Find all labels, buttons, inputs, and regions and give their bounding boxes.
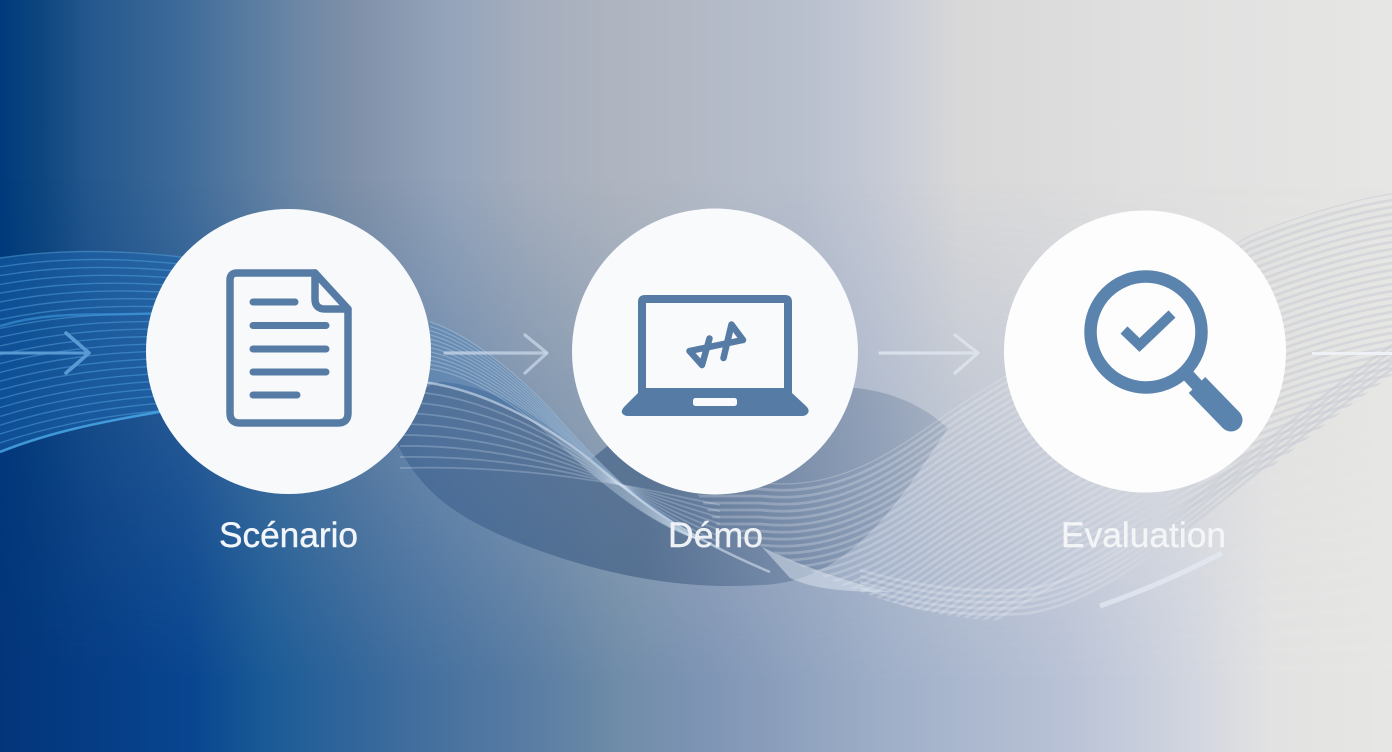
circle: demo xyxy=(572,208,858,494)
wave band: fan of lines inside the dark swoosh xyxy=(400,380,770,572)
arrow: demo to evaluation xyxy=(880,335,978,373)
wave band: right stripes rising to the top right xyxy=(698,193,1392,620)
bright streak under evaluation xyxy=(1100,553,1222,606)
label: evaluation: Evaluation xyxy=(1061,516,1226,555)
step 2: demo xyxy=(572,208,858,555)
icon: document xyxy=(230,273,348,423)
step 1: scenario xyxy=(146,209,431,555)
arrow: entering first step xyxy=(0,333,89,373)
label: demo: Démo xyxy=(668,516,763,555)
label: scenario: Scénario xyxy=(219,516,358,555)
dark swoosh shape xyxy=(395,382,948,586)
arrow: scenario to demo xyxy=(445,335,547,373)
icon: laptop xyxy=(622,295,809,416)
arrow: leaving evaluation xyxy=(1312,352,1392,355)
icon: magnifier with check xyxy=(1090,276,1242,432)
circle: evaluation xyxy=(1004,210,1286,492)
wave band: left blue lines xyxy=(0,251,190,452)
step 3: evaluation xyxy=(1004,210,1286,555)
wave band: tight lines between first and second circles xyxy=(400,322,700,587)
bright ribbon at the wave crossing xyxy=(762,547,890,592)
circle: scenario xyxy=(146,209,431,494)
